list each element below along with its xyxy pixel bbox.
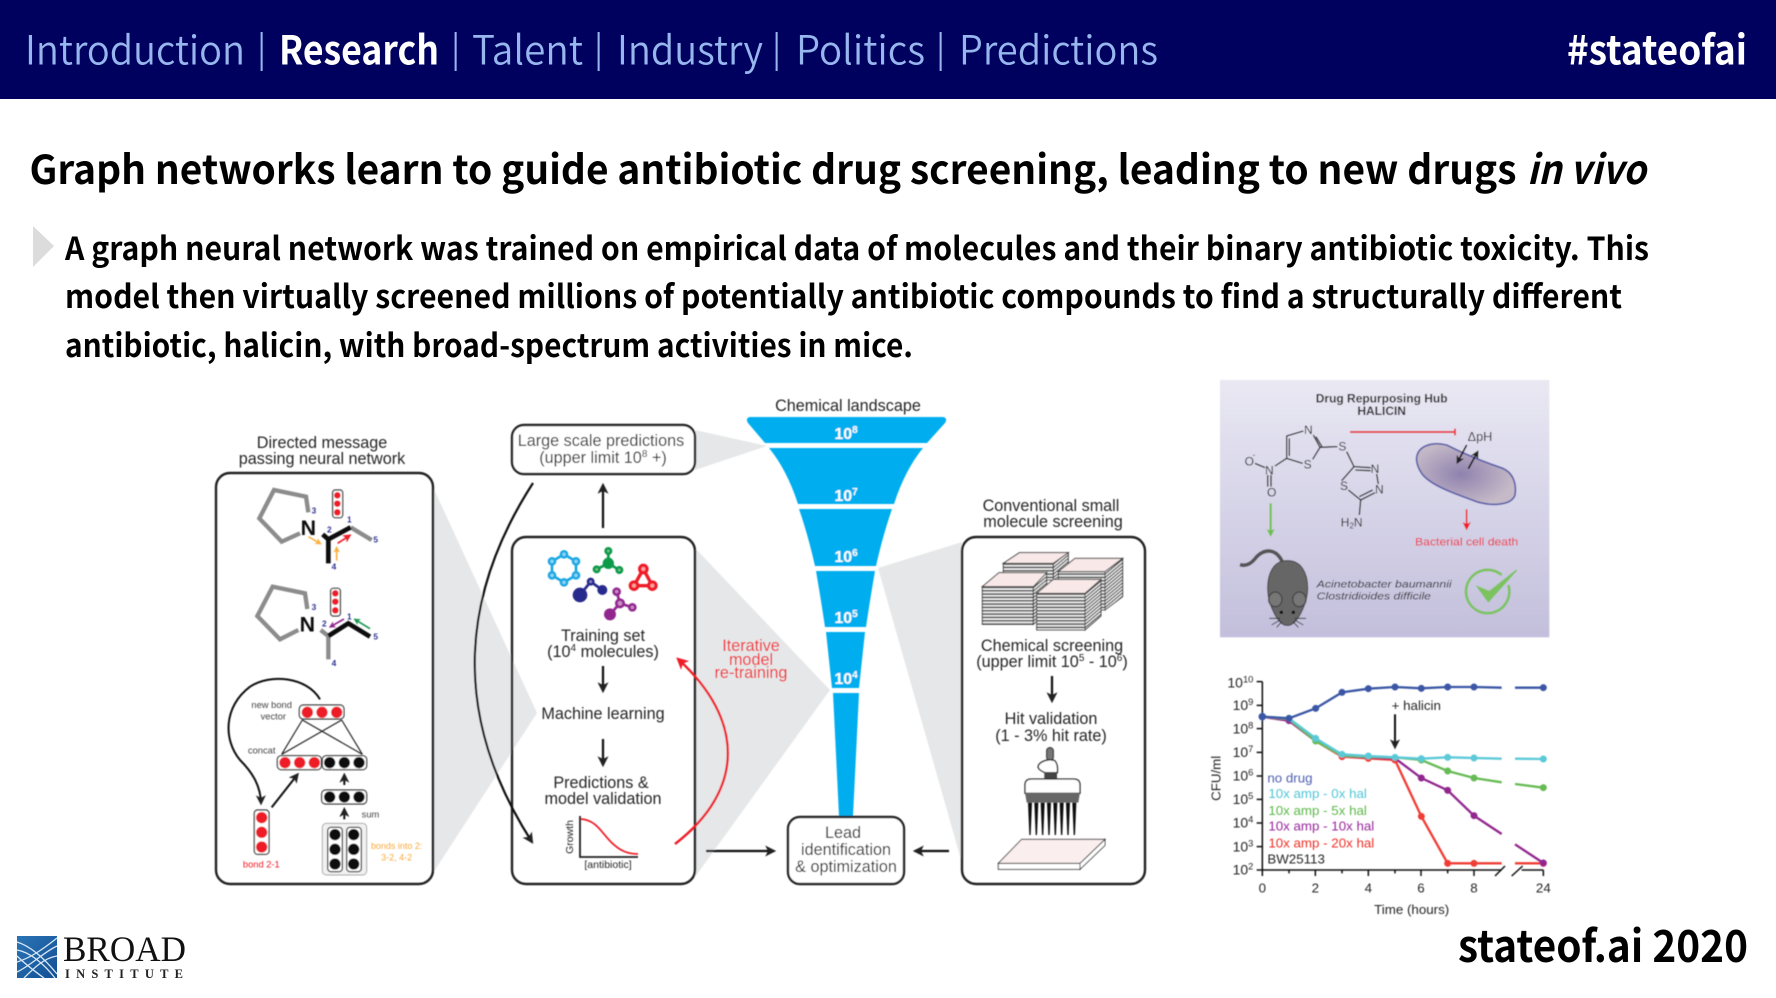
workflow figure (216, 380, 1551, 917)
label: iterative model re-training: model (729, 651, 773, 669)
y axis labels: 10 (1233, 768, 1248, 784)
halicin molecule: 2 (1349, 522, 1354, 531)
training set label: molecules) (576, 643, 659, 661)
y axis title: CFU/ml (1209, 756, 1224, 801)
annotation: plus halicin (1392, 698, 1441, 747)
molecule 1 (259, 490, 378, 571)
box: lead identification and optimization (788, 817, 904, 884)
molecule 2: 2 (322, 619, 327, 629)
y axis labels: 6 (1248, 768, 1253, 778)
susceptible species: Acinetobacter baumannii (1315, 579, 1453, 590)
axes (1257, 682, 1543, 876)
box: large scale predictions: Large scale predictions (518, 432, 684, 450)
funnel: chemical landscape: 6 (852, 548, 858, 559)
panel heading (1316, 391, 1448, 418)
chemical screening label: Chemical screening (981, 637, 1123, 655)
series: no drug (1259, 684, 1547, 722)
y axis labels: 5 (1248, 791, 1253, 801)
machine learning label: Machine learning (541, 705, 665, 723)
halicin molecule: O (1267, 486, 1276, 500)
curved arrow: predictions to validation (475, 483, 533, 842)
section navigation (25, 18, 1158, 76)
molecule 2: N (300, 613, 315, 637)
box: large scale predictions: +) (647, 449, 667, 467)
hit validation label: (1 - 3% hit rate) (995, 727, 1107, 745)
section navigation: Talent (472, 18, 583, 76)
series: 20x halicin (1262, 717, 1547, 867)
predictions label: model validation (545, 790, 661, 808)
chart: CFU/ml over time (1209, 675, 1551, 917)
legend: 10x amp - 5x hal (1268, 803, 1367, 818)
title: Graph networks learn to guide antibiotic drug screening, leading to new drugs (30, 138, 1516, 196)
x axis labels: 4 (1365, 881, 1373, 896)
y axis labels: 10 (1233, 862, 1248, 878)
body text (64, 224, 1649, 367)
chemical screening label (976, 637, 1128, 671)
chart: growth curve: [antibiotic] (584, 859, 632, 871)
section navigation: | (772, 21, 781, 72)
box: lead identification and optimization: & optimization (795, 858, 897, 876)
x axis title: Time (hours) (1374, 902, 1449, 917)
y axis labels: 10 (1227, 675, 1243, 691)
predictions label (545, 774, 661, 808)
hashtag: #stateofai (1567, 18, 1747, 76)
y axis labels: 7 (1248, 744, 1253, 754)
section navigation: | (936, 21, 945, 72)
panel heading: HALICIN (1357, 404, 1406, 418)
predictions label: Predictions & (553, 774, 649, 792)
panel: conventional small molecule screening (962, 497, 1145, 884)
chemical screening label: - 10 (1084, 653, 1117, 671)
x axis labels: 6 (1417, 881, 1425, 896)
series: 10x halicin (1262, 717, 1547, 866)
funnel: chemical landscape: 5 (852, 609, 858, 620)
box: large scale predictions (512, 425, 695, 474)
legend: 10x amp - 10x hal (1268, 818, 1374, 833)
legend: BW25113 (1267, 851, 1325, 866)
molecule 2 (257, 587, 378, 668)
y axis labels: 4 (1248, 815, 1253, 825)
series: 0x halicin (1262, 715, 1547, 762)
icon: mouse (1240, 551, 1308, 627)
icon: well plate (998, 839, 1105, 869)
x axis labels: 2 (1312, 881, 1319, 896)
chemical screening label: ) (1122, 653, 1128, 671)
y axis labels: 10 (1233, 697, 1248, 713)
logo: Broad Institute (17, 929, 186, 981)
molecule 2: 5 (373, 631, 378, 641)
y axis labels: 2 (1248, 862, 1253, 872)
panel heading: Directed message (257, 434, 387, 452)
icon: training molecules (549, 548, 656, 619)
footer: stateof.ai 2020: stateof.ai 2020 (1458, 911, 1748, 975)
series: 5x halicin (1262, 717, 1547, 791)
message passing schematic: concat (248, 745, 276, 755)
icon: check mark (1466, 570, 1517, 613)
logo subtitle: INSTITUTE (65, 967, 183, 981)
icon: compound plate stacks (982, 553, 1123, 630)
halicin molecule: N (1375, 482, 1384, 496)
arrow: hit validation to lead (915, 850, 949, 852)
y axis labels: 10 (1233, 838, 1248, 854)
grey connector wedges (433, 430, 962, 877)
curved arrow: iterative re-training (675, 659, 728, 844)
halicin molecule: S (1338, 440, 1346, 454)
message passing schematic: 3-2, 4-2 (381, 852, 412, 862)
y axis labels: 8 (1248, 720, 1253, 730)
y axis labels: 10 (1233, 815, 1248, 831)
halicin molecule (1245, 423, 1384, 531)
message passing schematic: bonds into 2: (371, 841, 422, 851)
header bar (0, 0, 1776, 99)
label: iterative model re-training: Iterative (722, 637, 780, 655)
body text: model then virtually screened millions of potentially antibiotic compounds to find a structurally different (65, 272, 1622, 318)
message passing schematic: sum (362, 810, 380, 820)
down arrows (602, 666, 604, 765)
molecule 1: 2 (327, 525, 332, 535)
bacterial cell death label: Bacterial cell death (1415, 537, 1518, 549)
box: lead identification and optimization: identification (801, 841, 891, 859)
x axis labels: 24 (1536, 881, 1551, 896)
section navigation: | (451, 21, 460, 72)
molecule 2: 1 (347, 611, 352, 621)
panel: directed message passing neural network (216, 434, 433, 884)
halicin molecule: H (1341, 515, 1349, 529)
halicin molecule: S (1340, 479, 1348, 493)
panel: training and validation (512, 537, 695, 884)
annotation: plus halicin: + halicin (1392, 698, 1441, 713)
chemical screening label: 5 (1079, 653, 1085, 664)
hit validation label (995, 710, 1107, 745)
funnel: chemical landscape: 4 (852, 670, 858, 681)
halicin molecule: N (1371, 462, 1379, 476)
susceptible species: Clostridioides difficile (1317, 591, 1432, 602)
panel: halicin mechanism (1220, 380, 1549, 637)
section navigation: | (257, 21, 266, 72)
section navigation: Industry (617, 18, 763, 76)
training set label (547, 627, 659, 661)
funnel: chemical landscape: Chemical landscape (775, 397, 921, 415)
hit validation label: Hit validation (1005, 710, 1097, 728)
icon: bacterium (1417, 430, 1515, 504)
y axis labels (1227, 675, 1253, 878)
x axis labels (1259, 881, 1551, 896)
title: in vivo (1527, 138, 1649, 196)
halicin molecule: - (1253, 449, 1256, 459)
label: iterative model re-training: re-training (715, 664, 787, 682)
training set label: (10 (547, 643, 571, 661)
halicin molecule: N (1265, 463, 1274, 477)
funnel: chemical landscape: 10 (834, 610, 852, 627)
training set label: Training set (561, 627, 645, 645)
funnel: chemical landscape: 10 (834, 488, 852, 505)
halicin molecule: S (1304, 457, 1312, 471)
y axis labels: 9 (1248, 697, 1253, 707)
susceptible species (1315, 579, 1453, 602)
funnel: chemical landscape (747, 397, 946, 816)
panel heading (983, 497, 1123, 531)
panel heading: passing neural network (239, 450, 406, 468)
arrow: to mouse (1268, 503, 1274, 535)
molecule 1: 3 (312, 505, 317, 515)
funnel: chemical landscape: 10 (834, 671, 852, 688)
molecule 1: 4 (332, 561, 337, 571)
network diagram details (229, 490, 422, 875)
y axis labels: 3 (1248, 838, 1253, 848)
box: large scale predictions: (upper limit 10 (539, 449, 642, 467)
panel heading: Drug Repurposing Hub (1316, 391, 1448, 405)
label: iterative model re-training (715, 637, 787, 682)
y axis labels: 10 (1233, 720, 1248, 736)
panel heading: molecule screening (983, 513, 1123, 531)
bullet marker (33, 226, 54, 267)
section navigation: Politics (796, 18, 925, 76)
section navigation: Introduction (25, 18, 245, 76)
section navigation: | (594, 21, 603, 72)
legend (1267, 771, 1374, 866)
logo mark (17, 936, 57, 978)
halicin molecule: O (1245, 455, 1254, 469)
molecule 1: 1 (347, 514, 352, 524)
icon: multichannel pipette (1025, 748, 1080, 835)
message passing schematic: bond 2-1 (243, 859, 280, 869)
molecule 2: 4 (332, 658, 337, 668)
panel heading (239, 434, 406, 468)
icon: bacterium: ΔpH (1468, 430, 1492, 444)
molecule 2: 3 (312, 602, 317, 612)
funnel: chemical landscape: 7 (852, 487, 858, 498)
y axis labels: 10 (1243, 675, 1253, 685)
x axis labels: 0 (1259, 881, 1266, 896)
training set label: 4 (571, 643, 577, 654)
inhibition line (1350, 429, 1455, 435)
body text: antibiotic, halicin, with broad-spectrum activities in mice. (65, 321, 913, 367)
halicin molecule: N (1354, 515, 1363, 529)
message passing schematic: vector (261, 711, 286, 721)
chemical screening label: (upper limit 10 (976, 653, 1079, 671)
legend: 10x amp - 20x hal (1268, 835, 1374, 850)
body text: A graph neural network was trained on empirical data of molecules and their binary antibiotic toxicity. This (64, 224, 1649, 270)
logo wordmark: BROAD (63, 929, 186, 969)
halicin molecule: N (1304, 423, 1313, 437)
funnel: chemical landscape: 8 (852, 425, 858, 436)
message passing schematic (229, 679, 422, 875)
section navigation: Research (279, 18, 439, 76)
chart: growth curve (564, 816, 638, 871)
funnel: chemical landscape: 10 (834, 426, 852, 443)
y axis labels: 10 (1233, 744, 1248, 760)
legend: 10x amp - 0x hal (1268, 786, 1367, 801)
section navigation: Predictions (959, 18, 1158, 76)
funnel: chemical landscape: 10 (834, 549, 852, 566)
box: large scale predictions: 8 (642, 449, 648, 460)
chemical screening label: 6 (1117, 653, 1123, 664)
molecule 1: N (301, 516, 316, 540)
molecule 1: 5 (373, 535, 378, 545)
panel heading: Conventional small (983, 497, 1119, 515)
message passing schematic: new bond (251, 700, 292, 710)
arrow: to cell death (1464, 509, 1469, 529)
x axis labels: 8 (1470, 881, 1478, 896)
chart: growth curve: Growth (564, 820, 576, 854)
arrow: training up to predictions (602, 485, 604, 528)
legend: no drug (1267, 771, 1313, 786)
arrow: validation to lead (706, 850, 774, 852)
box: lead identification and optimization: Lead (825, 824, 861, 842)
arrow: screening to hit validation (1051, 676, 1053, 701)
y axis labels: 10 (1233, 791, 1248, 807)
